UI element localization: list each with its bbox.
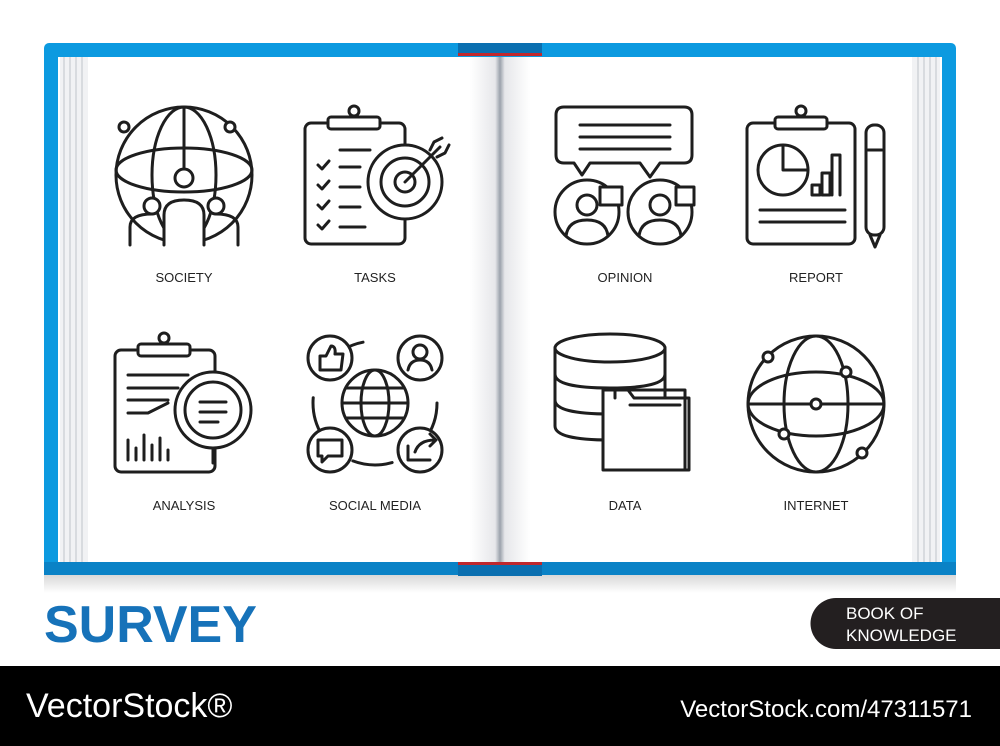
icon: society <box>116 107 252 245</box>
icon: social media <box>308 336 442 472</box>
text: social media label: SOCIAL MEDIA <box>329 498 421 513</box>
icon: tasks <box>305 106 449 244</box>
title: SURVEY <box>44 596 257 654</box>
text: report label: REPORT <box>789 270 843 285</box>
badge: book of knowledge: KNOWLEDGE <box>846 626 957 645</box>
book <box>44 43 956 593</box>
text: society label: SOCIETY <box>155 270 213 285</box>
footer bar: VectorStock® <box>26 687 232 725</box>
footer bar: VectorStock.com/47311571 <box>680 696 972 723</box>
text: analysis label: ANALYSIS <box>153 498 216 513</box>
text: tasks label: TASKS <box>354 270 396 285</box>
icon: data <box>555 334 689 470</box>
footer bar <box>0 666 1000 746</box>
icon: report <box>747 106 884 247</box>
text: data label: DATA <box>609 498 642 513</box>
icon: analysis <box>115 333 251 472</box>
icon: internet <box>748 336 884 472</box>
text: opinion label: OPINION <box>598 270 652 285</box>
text: internet label: INTERNET <box>784 498 849 513</box>
badge: book of knowledge: BOOK OF <box>846 604 923 623</box>
badge: book of knowledge <box>810 598 1000 649</box>
icon: opinion <box>555 107 694 244</box>
